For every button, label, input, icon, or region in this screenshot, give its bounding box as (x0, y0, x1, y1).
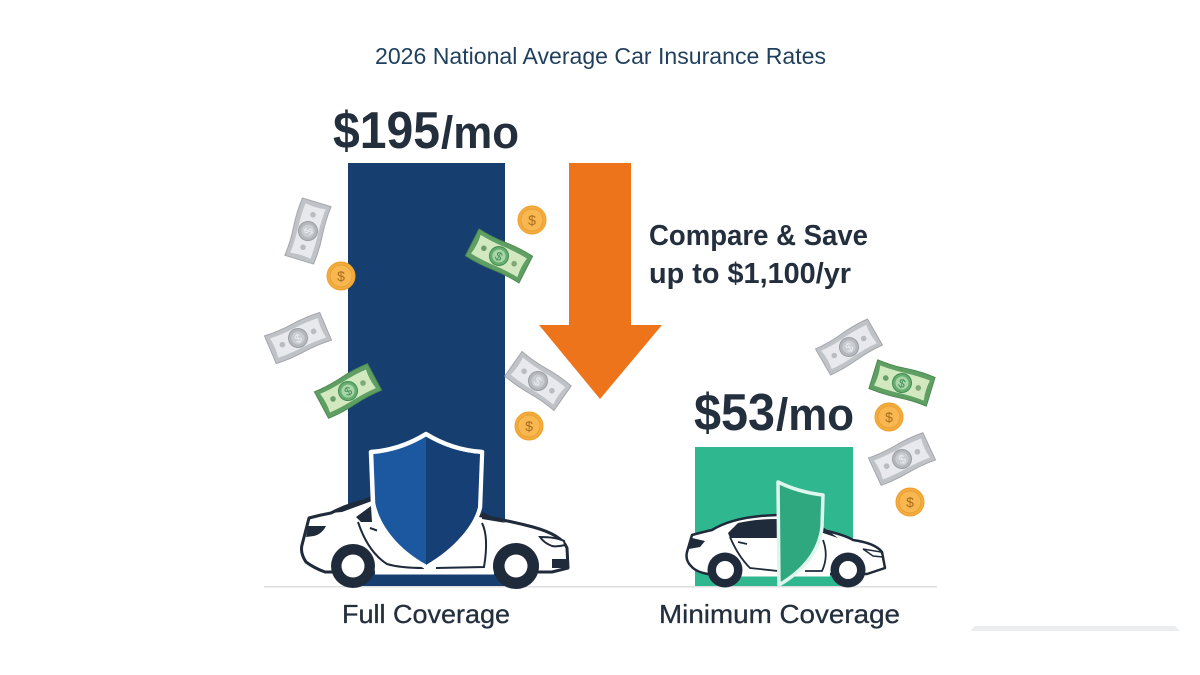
car: minimum coverage (686, 515, 885, 588)
savings callout: Compare & Save (649, 220, 868, 252)
full coverage value: $195 (333, 102, 440, 160)
money: minimum coverage (815, 318, 936, 516)
car: full coverage (302, 496, 568, 589)
minimum coverage value: $53 (694, 384, 775, 442)
arrow: savings (539, 163, 662, 399)
minimum coverage value (694, 384, 854, 442)
money: right of full coverage bar (465, 206, 572, 440)
title: 2026 National Average Car Insurance Rates (375, 43, 826, 69)
baseline (264, 586, 937, 588)
icon: blue shield (371, 434, 482, 567)
full coverage value (333, 102, 519, 160)
faint strip (970, 626, 1180, 631)
full coverage value: /mo (441, 107, 519, 158)
savings callout: up to $1,100/yr (649, 258, 851, 290)
minimum coverage value: /mo (776, 389, 854, 440)
bar: full coverage (348, 163, 505, 586)
savings callout (649, 220, 868, 290)
label: minimum coverage: Minimum Coverage (659, 599, 900, 629)
money: left of full coverage bar (264, 198, 382, 419)
bar: minimum coverage (695, 447, 853, 586)
label: full coverage: Full Coverage (342, 599, 510, 629)
icon: green half shield (778, 482, 823, 585)
